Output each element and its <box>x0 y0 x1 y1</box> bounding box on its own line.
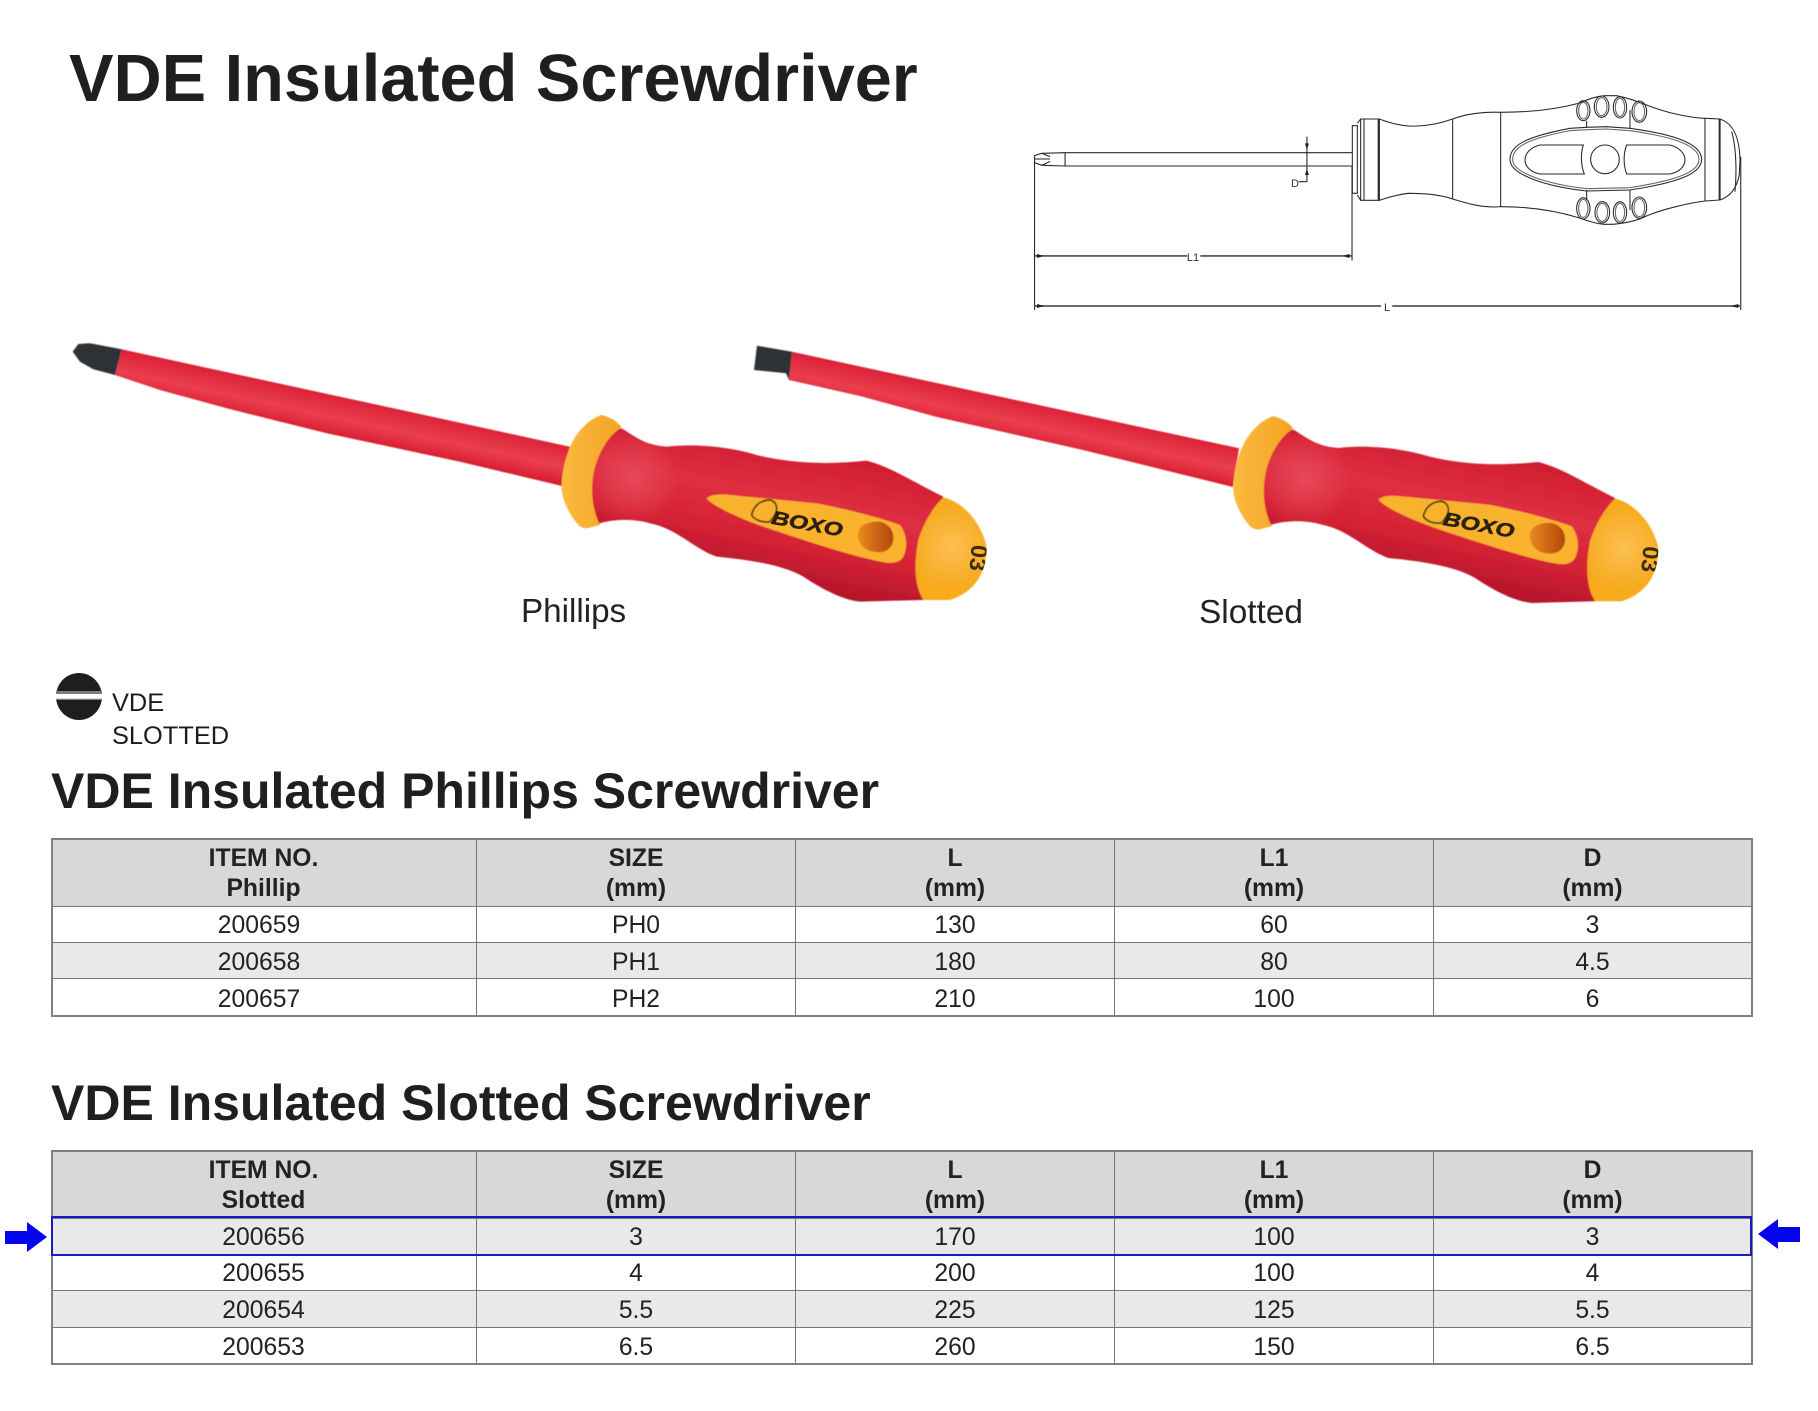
row: 200657: 100 <box>1253 986 1295 1013</box>
row: 200657: 6 <box>1586 986 1599 1013</box>
illustration: Phillips screwdriver <box>72 342 988 602</box>
header row: D <box>1584 845 1601 872</box>
row: 200653: 6.5 <box>1575 1334 1610 1361</box>
illustration: Slotted screwdriver: BOXO <box>1441 509 1516 543</box>
icon: slotted tip <box>56 673 102 720</box>
table: Phillips specifications <box>51 838 1753 1017</box>
row: 200654 <box>53 1291 1751 1327</box>
row: 200657 <box>218 986 1599 1013</box>
row: 200653: 150 <box>1253 1334 1295 1361</box>
row: 200654: 125 <box>1253 1297 1295 1324</box>
row: 200659: 130 <box>934 912 976 939</box>
row: 200654: 225 <box>934 1297 976 1324</box>
row: 200659: 200659 <box>218 912 300 939</box>
header row: (mm) <box>925 1187 985 1214</box>
header row: ITEM NO. <box>209 845 318 872</box>
header row: L <box>947 1157 963 1184</box>
row: 200654: 5.5 <box>1575 1297 1610 1324</box>
row: 200653 <box>222 1334 1610 1361</box>
row: 200655: 200 <box>934 1260 976 1287</box>
row: 200656: 170 <box>934 1224 976 1251</box>
illustration: Phillips screwdriver: 03 <box>965 544 993 572</box>
row: 200658: 80 <box>1260 949 1288 976</box>
header row <box>53 840 1751 1013</box>
header row: (mm) <box>606 875 666 902</box>
row: 200655 <box>222 1260 1599 1287</box>
highlight: selected row outline <box>51 1216 1752 1256</box>
row: 200657: PH2 <box>612 986 660 1013</box>
header row: Phillip <box>226 875 301 902</box>
heading: Slotted table: VDE Insulated Slotted Screwdriver <box>51 1075 871 1131</box>
table: Slotted specifications <box>51 1150 1753 1365</box>
header row: (mm) <box>1562 875 1623 902</box>
label: VDE SLOTTED: VDE <box>112 689 164 717</box>
row: 200654: 200654 <box>222 1297 305 1324</box>
technical drawing: screwdriver dimensions <box>1034 95 1742 314</box>
header row: L <box>947 845 963 872</box>
row: 200658 <box>53 943 1751 978</box>
row: 200657: 210 <box>934 986 976 1013</box>
label: Slotted: Slotted <box>1199 594 1303 631</box>
header row: SIZE <box>609 845 663 872</box>
row: 200658: PH1 <box>612 949 660 976</box>
row: 200653: 200653 <box>222 1334 305 1361</box>
header row: ITEM NO. <box>209 1157 318 1184</box>
row: 200658: 180 <box>934 949 976 976</box>
row: 200654: 5.5 <box>619 1297 653 1324</box>
header row: L1 <box>1260 845 1288 872</box>
label: VDE SLOTTED <box>112 689 229 750</box>
row: 200659: 3 <box>1586 912 1599 939</box>
arrow: right pointer <box>1758 1219 1800 1249</box>
header row: (mm) <box>925 875 985 902</box>
row: 200659: 60 <box>1260 912 1288 939</box>
row: 200658: 4.5 <box>1575 949 1610 976</box>
illustration: Slotted screwdriver <box>753 345 1660 604</box>
row: 200655: 100 <box>1253 1260 1295 1287</box>
row: 200653: 6.5 <box>619 1334 653 1361</box>
header row <box>53 1152 1751 1361</box>
header row: D <box>1584 1157 1601 1184</box>
row: 200659 <box>218 912 1599 939</box>
row: 200657: 200657 <box>218 986 300 1013</box>
technical drawing: screwdriver dimensions: L1 <box>1187 252 1199 264</box>
heading: Phillips table: VDE Insulated Phillips Screwdriver <box>51 763 879 819</box>
title: VDE Insulated Screwdriver <box>69 42 918 116</box>
label: VDE SLOTTED: SLOTTED <box>112 722 229 750</box>
label: Phillips: Phillips <box>521 593 626 630</box>
row: 200656: 3 <box>629 1224 643 1251</box>
row: 200655: 200655 <box>222 1260 305 1287</box>
arrow: left pointer <box>5 1222 47 1252</box>
header row: (mm) <box>606 1187 666 1214</box>
row: 200656: 100 <box>1253 1224 1295 1251</box>
illustration: Phillips screwdriver: BOXO <box>770 508 845 542</box>
row: 200656: 200656 <box>222 1224 305 1251</box>
illustration: Slotted screwdriver: 03 <box>1636 545 1664 573</box>
row: 200655: 4 <box>1586 1260 1599 1287</box>
header row: (mm) <box>1562 1187 1623 1214</box>
row: 200659: PH0 <box>612 912 660 939</box>
header row: (mm) <box>1244 1187 1304 1214</box>
row: 200658: 200658 <box>218 949 300 976</box>
header row: L1 <box>1260 1157 1288 1184</box>
header row: (mm) <box>1244 875 1304 902</box>
row: 200653: 260 <box>934 1334 976 1361</box>
technical drawing: screwdriver dimensions: L <box>1384 302 1390 314</box>
row: 200656: 3 <box>1586 1224 1599 1251</box>
row: 200656 <box>53 1219 1750 1254</box>
row: 200655: 4 <box>629 1260 643 1287</box>
header row: Slotted <box>222 1187 305 1214</box>
header row: SIZE <box>609 1157 663 1184</box>
technical drawing: screwdriver dimensions: D <box>1291 178 1299 190</box>
